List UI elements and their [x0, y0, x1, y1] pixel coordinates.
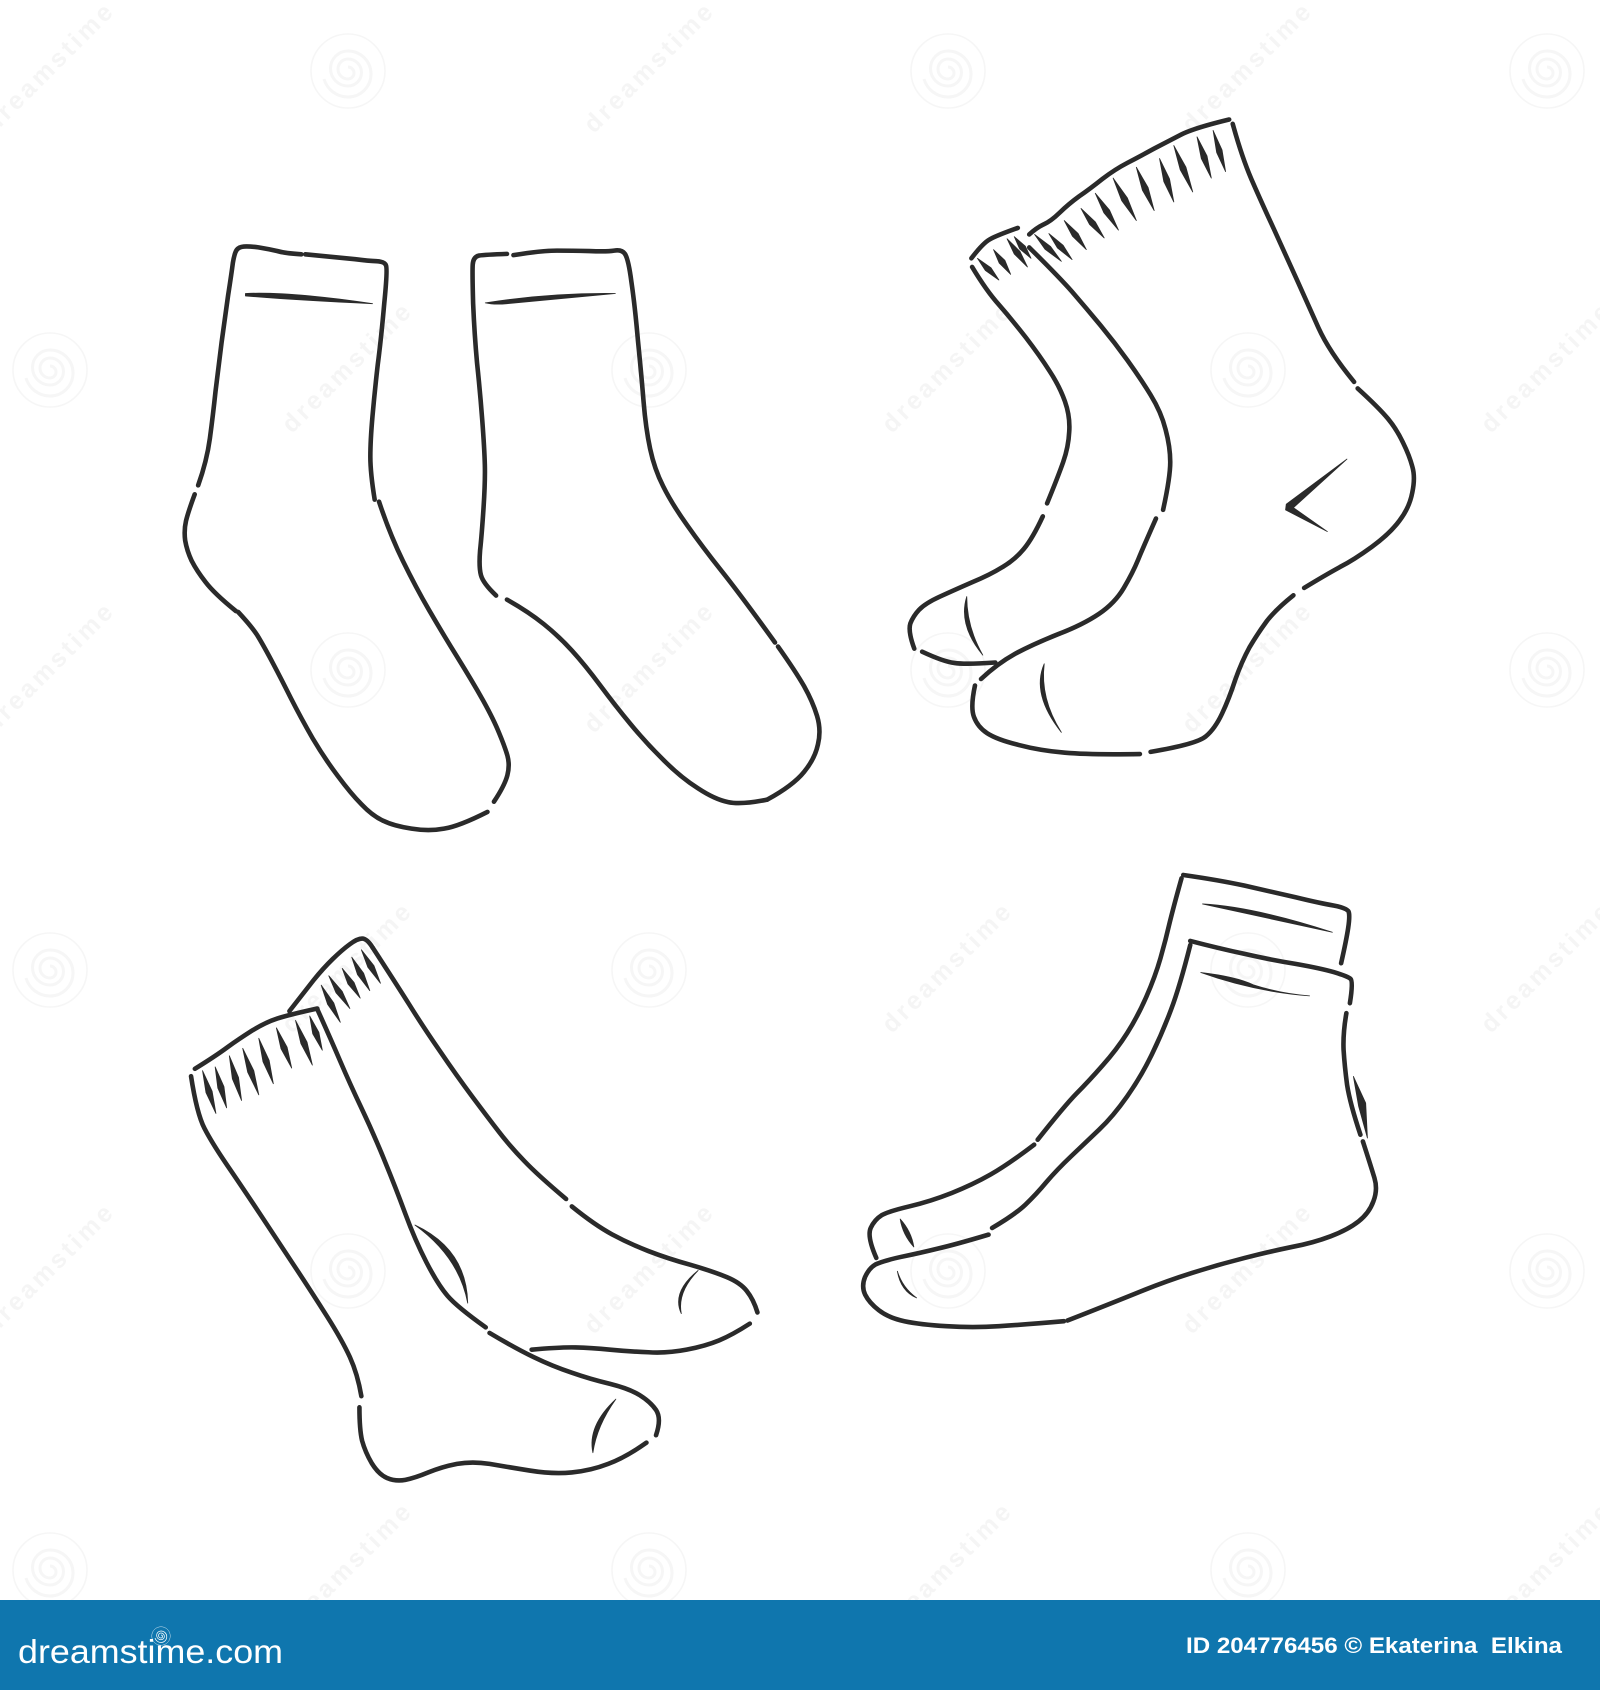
watermark pattern: dreamstime — [578, 0, 718, 138]
rear sock — [289, 939, 757, 1353]
icon: pair of flat crew socks, top left — [185, 246, 819, 830]
icon: pair of ribbed socks, bottom left — [191, 939, 757, 1480]
watermark pattern: dreamstime — [1176, 598, 1316, 738]
front sock — [863, 941, 1376, 1327]
icon: pair of ankle socks, bottom right — [863, 875, 1376, 1327]
front sock — [972, 120, 1414, 754]
watermark pattern: dreamstime — [1176, 1199, 1316, 1339]
watermark pattern: dreamstime — [578, 1199, 718, 1339]
watermark pattern: dreamstime — [876, 898, 1016, 1038]
footer bar — [0, 1600, 1600, 1690]
rear sock — [870, 875, 1367, 1258]
icon: pair of ribbed socks, top right — [910, 120, 1414, 754]
watermark pattern: dreamstime — [276, 1498, 416, 1638]
rear sock — [910, 228, 1069, 664]
footer credit: ID 204776456 © Ekaterina Elkina — [1186, 1633, 1563, 1658]
watermark pattern: dreamstime — [876, 298, 1016, 438]
watermark pattern: dreamstime — [1176, 0, 1316, 138]
left sock — [185, 246, 509, 830]
watermark pattern: dreamstime — [578, 598, 718, 738]
right sock — [473, 250, 819, 803]
watermark pattern: dreamstime — [276, 298, 416, 438]
watermark pattern: dreamstime — [876, 1498, 1016, 1638]
footer logo: dreamstime.com — [18, 1633, 283, 1670]
watermark pattern: dreamstime — [276, 898, 416, 1038]
front sock — [191, 1009, 659, 1480]
